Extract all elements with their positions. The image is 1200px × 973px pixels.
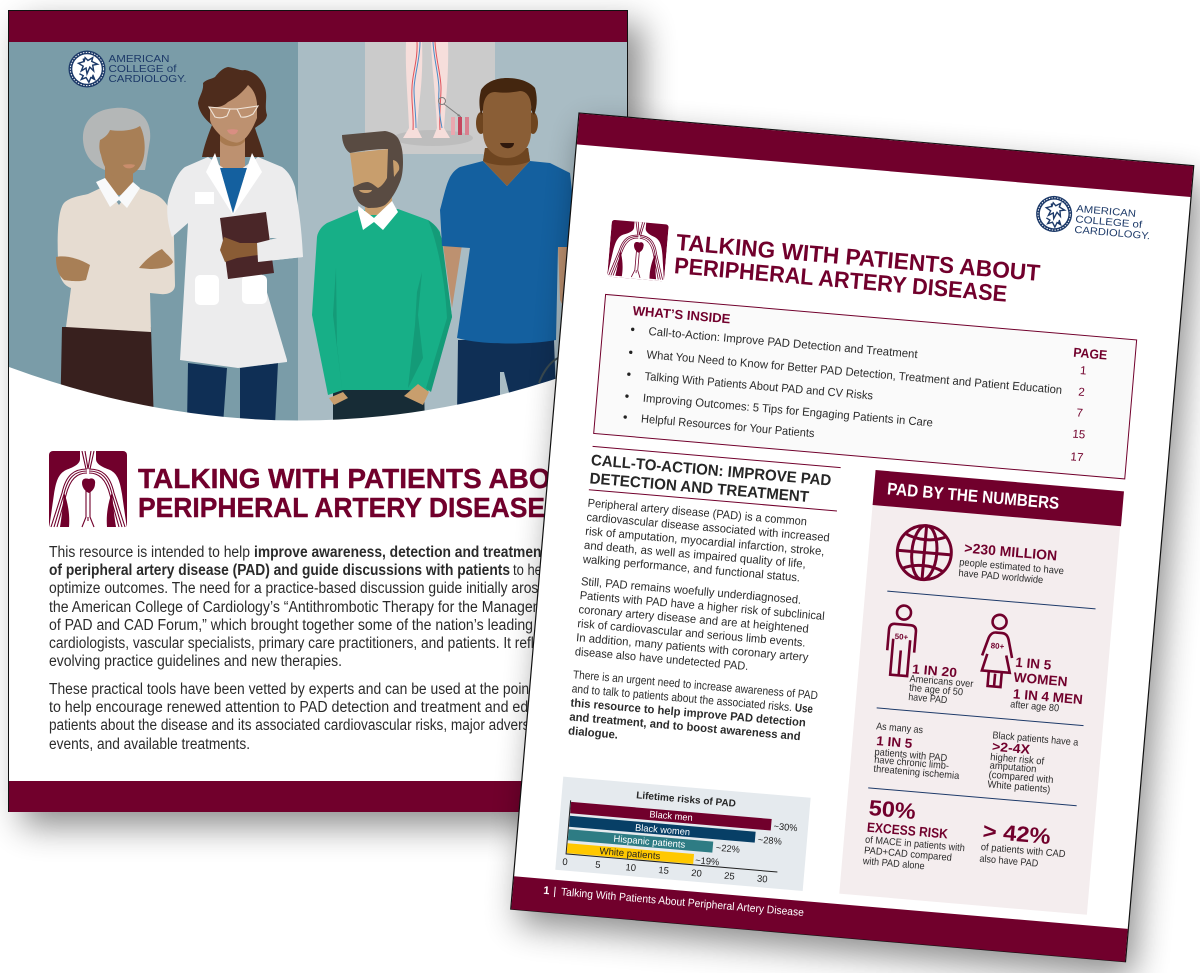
bar chart: lifetime risks of PAD bbox=[555, 777, 811, 891]
numbers header: PAD BY THE NUMBERS bbox=[886, 479, 1060, 513]
stat: 230 million: people estimated to have bbox=[959, 557, 1065, 577]
logo: American College of Cardiology (page): AMERICAN bbox=[1076, 204, 1136, 220]
cover intro paragraph: cardiologists, vascular specialists, primary care practitioners, and patients. It reflects bbox=[49, 635, 559, 652]
cover title bbox=[138, 463, 588, 523]
stat: greater than 2-4X amputation: (compared with bbox=[988, 770, 1054, 786]
x axis ticks: 25 bbox=[724, 871, 735, 883]
page numbers: 1 bbox=[1080, 364, 1087, 378]
person: woman with grey hair bbox=[56, 108, 175, 425]
contents list: Improving Outcomes: 5 Tips for Engaging Patients in Care bbox=[642, 392, 933, 430]
stat: greater than 2-4X amputation: Black patients have a bbox=[992, 730, 1079, 749]
call-to-action heading: DETECTION AND TREATMENT bbox=[589, 470, 810, 506]
illustration: clinic scene with four people bbox=[9, 42, 628, 430]
bar labels: White patients bbox=[599, 846, 661, 862]
logo: American College of Cardiology (cover): AMERICAN bbox=[108, 53, 170, 65]
logo: American College of Cardiology (cover) bbox=[68, 50, 186, 88]
stat: greater than 2-4X amputation: amputation bbox=[989, 760, 1037, 775]
contents list: What You Need to Know for Better PAD Detection, Treatment and Patient Education bbox=[646, 348, 1063, 397]
bar labels: ~19% bbox=[695, 855, 720, 868]
panel: what's inside bbox=[594, 294, 1137, 479]
stat: greater than 2-4X amputation: White patients) bbox=[987, 779, 1051, 796]
body paragraph 1: and death, as well as impaired quality of life, bbox=[584, 539, 806, 571]
icon: person 50+: 50+ bbox=[894, 632, 909, 642]
stat: greater than 42%: of patients with CAD bbox=[980, 842, 1066, 860]
cover intro paragraph: improve awareness, detection and treatment bbox=[254, 544, 546, 561]
icon: person 80+: 80+ bbox=[990, 641, 1005, 651]
body paragraph 3: There is an urgent need to increase awareness of PAD bbox=[572, 668, 818, 702]
stat: 230 million bbox=[958, 539, 1066, 588]
cover top band bbox=[9, 11, 627, 42]
stat: greater than 2-4X amputation: >2-4X bbox=[991, 739, 1031, 757]
body paragraph 3: this resource to help improve PAD detection bbox=[570, 696, 806, 729]
cover intro paragraph: This resource is intended to help bbox=[49, 544, 250, 561]
cover intro paragraph: evolving practice guidelines and new therapies. bbox=[49, 653, 342, 670]
inside page footer band: 1 bbox=[543, 885, 550, 897]
chart title: Lifetime risks of PAD bbox=[636, 790, 736, 810]
cover title: PERIPHERAL ARTERY DISEASE bbox=[138, 492, 545, 523]
call-to-action heading: CALL-TO-ACTION: IMPROVE PAD bbox=[590, 452, 832, 490]
cover intro paragraph bbox=[49, 544, 565, 670]
inside page footer band: | bbox=[553, 886, 557, 898]
stat: 50% excess risk bbox=[861, 795, 969, 876]
person: bearded man in green sweater bbox=[312, 131, 452, 425]
stat: greater than 2-4X amputation bbox=[987, 730, 1079, 798]
body paragraph 2: Still, PAD remains woefully underdiagnosed. bbox=[580, 575, 802, 607]
cover intro paragraph: of PAD and CAD Forum,” which brought together some of the nation’s leading bbox=[49, 617, 533, 634]
stat: 1 in 5 women, 1 in 4 men: 1 IN 4 MEN bbox=[1012, 686, 1083, 707]
panel: inside page bbox=[511, 113, 1194, 962]
body paragraph 2 bbox=[574, 575, 826, 679]
icon: globe bbox=[895, 523, 954, 582]
stat: 230 million: >230 MILLION bbox=[964, 540, 1058, 564]
body paragraph 2: coronary artery disease and are at heightened bbox=[578, 603, 809, 636]
body paragraph 3: and to talk to patients about the associated risks. bbox=[571, 682, 793, 714]
logo: American College of Cardiology (cover): CARDIOLOGY. bbox=[108, 73, 186, 85]
cover second paragraph: events, and available treatments. bbox=[49, 736, 250, 753]
icon: artery body bbox=[49, 451, 127, 529]
stat: 50% excess risk: with PAD alone bbox=[861, 856, 925, 872]
stat: greater than 2-4X amputation: higher risk of bbox=[990, 752, 1045, 768]
x axis ticks: 5 bbox=[595, 860, 601, 871]
shadow: cover page bbox=[22, 24, 642, 826]
body paragraph 3: dialogue. bbox=[568, 724, 619, 742]
logo: American College of Cardiology (page): CARDIOLOGY. bbox=[1074, 225, 1151, 242]
stat: greater than 42%: > 42% bbox=[982, 818, 1052, 849]
bar labels: Black men bbox=[649, 809, 693, 824]
x axis ticks: 15 bbox=[658, 865, 669, 877]
inside page footer band bbox=[511, 876, 1128, 962]
shadow: inside page bbox=[518, 128, 1200, 973]
page numbers: 15 bbox=[1072, 428, 1086, 442]
stat: greater than 42% bbox=[979, 818, 1068, 872]
cover intro paragraph: of peripheral artery disease (PAD) and guide discussions with patients bbox=[49, 562, 510, 579]
contents list bbox=[623, 324, 1065, 461]
page numbers: 2 bbox=[1078, 385, 1085, 399]
cover intro paragraph: to help bbox=[513, 562, 552, 579]
stat: greater than 42%: also have PAD bbox=[979, 854, 1039, 870]
page numbers bbox=[1064, 345, 1108, 466]
call-to-action heading bbox=[589, 446, 841, 511]
stat: 230 million: have PAD worldwide bbox=[958, 568, 1044, 586]
contents list: Helpful Resources for Your Patients bbox=[641, 412, 815, 440]
icon: person 80+ bbox=[980, 614, 1016, 688]
contents list: Talking With Patients About PAD and CV Risks bbox=[644, 370, 874, 403]
stat: 1 in 5 women, 1 in 4 men bbox=[1010, 655, 1086, 716]
cover second paragraph: patients about the disease and its associated cardiovascular risks, major adverse bbox=[49, 717, 537, 734]
stat: 1 in 20 bbox=[908, 661, 975, 708]
stat: 50% excess risk: 50% bbox=[868, 795, 917, 824]
x axis ticks bbox=[562, 857, 768, 885]
logo: American College of Cardiology (page) bbox=[1034, 194, 1153, 242]
cover bottom band bbox=[9, 781, 627, 812]
numbers header bbox=[873, 470, 1124, 526]
cover intro paragraph: the American College of Cardiology’s “Antithrombotic Therapy for the Management bbox=[49, 599, 565, 616]
stat: 1 in 5 women, 1 in 4 men: WOMEN bbox=[1013, 670, 1068, 689]
bar labels: ~30% bbox=[773, 821, 798, 834]
stat: 1 in 20: have PAD bbox=[908, 692, 948, 706]
cover intro paragraph: optimize outcomes. The need for a practice-based discussion guide initially arose bbox=[49, 580, 546, 597]
bar labels: ~28% bbox=[757, 835, 783, 848]
page numbers: PAGE bbox=[1073, 345, 1108, 363]
body paragraph 3 bbox=[568, 668, 818, 758]
person: man in blue shirt bbox=[440, 78, 578, 415]
logo: American College of Cardiology (cover): COLLEGE of bbox=[108, 63, 177, 75]
body paragraph 2: disease also have undetected PAD. bbox=[574, 645, 749, 673]
stat: 1 in 5 chronic limb-threatening ischemia: patients with PAD bbox=[874, 747, 948, 764]
body paragraph 2: risk of cardiovascular and serious limb events. bbox=[577, 617, 806, 650]
page numbers: 17 bbox=[1070, 450, 1084, 464]
stat: 50% excess risk: EXCESS RISK bbox=[866, 820, 949, 842]
stat: 1 in 20: 1 IN 20 bbox=[912, 661, 958, 680]
cover second paragraph: These practical tools have been vetted by experts and can be used at the point bbox=[49, 681, 534, 698]
stat: 1 in 5 women, 1 in 4 men: 1 IN 5 bbox=[1015, 655, 1052, 673]
icon: artery body small bbox=[607, 220, 669, 281]
body paragraph 1: risk of amputation, myocardial infarction, stroke, bbox=[585, 525, 825, 558]
x axis ticks: 20 bbox=[691, 868, 702, 880]
icon: person 50+ bbox=[885, 604, 918, 677]
body paragraph 1: walking performance, and functional status. bbox=[581, 553, 801, 584]
person: doctor with clipboard bbox=[167, 67, 303, 425]
body paragraph 2: Patients with PAD have a higher risk of subclinical bbox=[579, 589, 825, 623]
stat: 1 in 5 chronic limb-threatening ischemia: 1 IN 5 bbox=[876, 733, 913, 751]
cover second paragraph bbox=[49, 681, 563, 753]
stat: 1 in 5 chronic limb-threatening ischemia: threatening ischemia bbox=[873, 764, 960, 782]
page title: PERIPHERAL ARTERY DISEASE bbox=[673, 252, 1008, 307]
bar labels: ~22% bbox=[715, 843, 741, 856]
stat: 1 in 5 chronic limb-threatening ischemia bbox=[872, 721, 964, 782]
body paragraph 1: cardiovascular disease associated with increased bbox=[586, 511, 830, 545]
what's inside heading: WHAT’S INSIDE bbox=[632, 303, 731, 326]
body paragraph 3: Use bbox=[794, 701, 814, 716]
cover second paragraph: to help encourage renewed attention to PAD detection and treatment and educate bbox=[49, 699, 563, 716]
panel: cover page bbox=[8, 10, 628, 812]
cover title: TALKING WITH PATIENTS ABOUT bbox=[138, 463, 588, 494]
contents list: Call-to-Action: Improve PAD Detection and Treatment bbox=[648, 325, 919, 361]
bars bbox=[567, 802, 772, 870]
body paragraph 2: In addition, many patients with coronary artery bbox=[576, 631, 809, 664]
bar labels: Black women bbox=[635, 823, 690, 838]
stat: 50% excess risk: PAD+CAD compared bbox=[864, 845, 952, 864]
bar labels: Hispanic patients bbox=[613, 834, 686, 851]
x axis ticks: 10 bbox=[625, 862, 636, 874]
logo: American College of Cardiology (page): COLLEGE of bbox=[1075, 214, 1143, 231]
page numbers: 7 bbox=[1076, 406, 1083, 420]
x axis ticks: 30 bbox=[756, 874, 768, 885]
stat: 1 in 20: Americans over bbox=[909, 674, 974, 690]
stat: 1 in 20: the age of 50 bbox=[909, 683, 964, 698]
stat: 1 in 5 chronic limb-threatening ischemia: As many as bbox=[876, 721, 923, 736]
inside page top band bbox=[577, 114, 1193, 197]
body paragraph 1 bbox=[581, 497, 831, 587]
inside page footer band: Talking With Patients About Peripheral Artery Disease bbox=[561, 886, 804, 919]
bar labels bbox=[599, 805, 799, 875]
body paragraph 3: and treatment, and to boost awareness and bbox=[569, 710, 801, 743]
stat: 50% excess risk: of MACE in patients with bbox=[865, 835, 965, 854]
panel: PAD by the numbers bbox=[839, 470, 1124, 915]
page title: TALKING WITH PATIENTS ABOUT bbox=[675, 229, 1041, 286]
x axis ticks: 0 bbox=[562, 857, 568, 868]
stat: 1 in 5 chronic limb-threatening ischemia: have chronic limb- bbox=[874, 755, 949, 772]
poster: leg arteries bbox=[365, 42, 495, 154]
white curved wave bbox=[9, 352, 628, 430]
body paragraph 1: Peripheral artery disease (PAD) is a common bbox=[587, 497, 807, 528]
stat: 1 in 5 women, 1 in 4 men: after age 80 bbox=[1010, 699, 1060, 714]
